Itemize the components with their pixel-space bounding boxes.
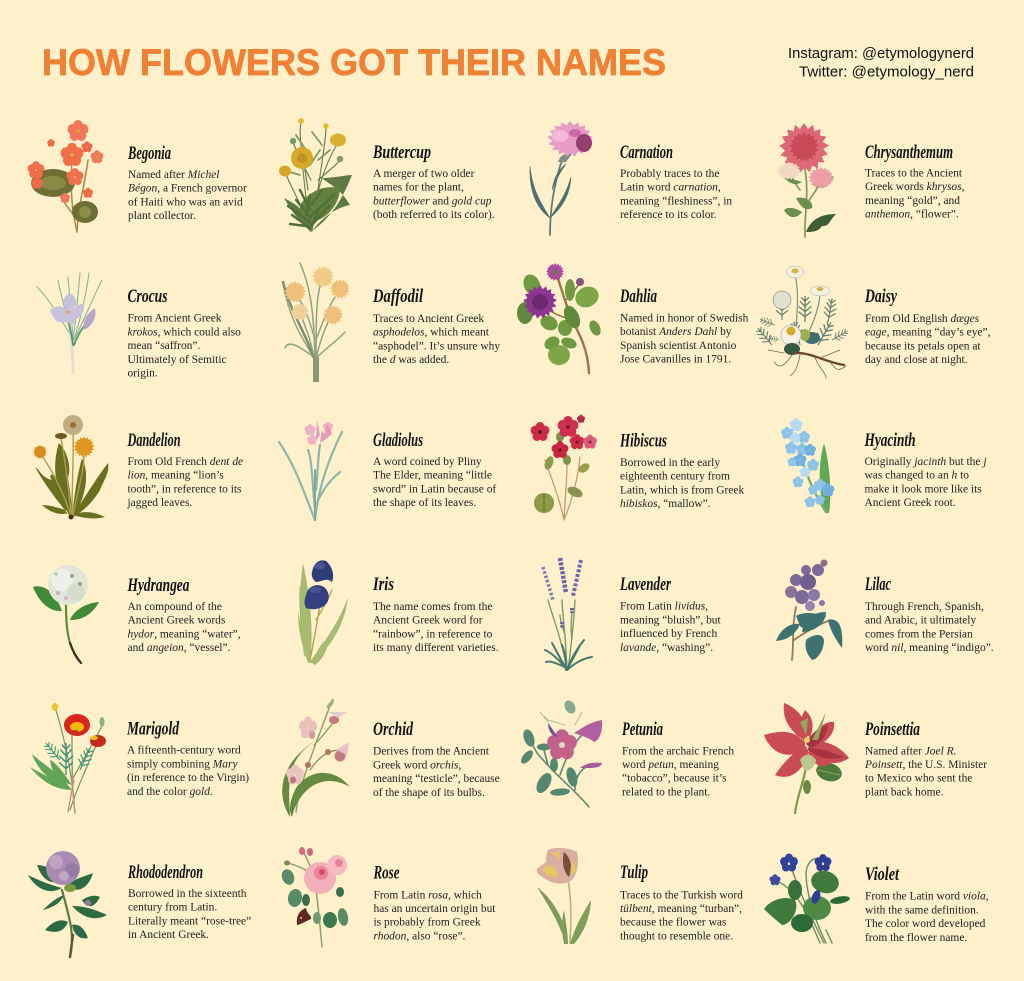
- icon: poinsettia flower: [764, 703, 849, 813]
- text: Marigold: (in reference to the Virgin): [127, 772, 249, 784]
- text: Crocus: From Ancient Greek: [128, 313, 222, 325]
- text: Daisy: eage, meaning “day’s eye”,: [865, 327, 990, 339]
- text: Carnation: Probably traces to the: [620, 168, 719, 180]
- text: Lilac: Through French, Spanish,: [865, 601, 984, 613]
- text: Lavender: From Latin lividus,: [620, 601, 708, 613]
- label: Marigold: Marigold: [126, 718, 179, 740]
- text: Petunia: related to the plant.: [622, 786, 710, 798]
- label: Rose: Rose: [373, 863, 400, 884]
- text: Dandelion: tooth”, in reference to its: [128, 483, 242, 495]
- text: Poinsettia: Poinsett, the U.S. Minister: [865, 759, 987, 771]
- text: Iris: Ancient Greek word for: [373, 615, 483, 627]
- entry: Orchid: [282, 698, 500, 817]
- text: Buttercup: names for the plant,: [373, 182, 464, 194]
- icon: orchid flower: [282, 698, 350, 817]
- text: Crocus: origin.: [128, 368, 158, 380]
- social handles: [788, 45, 974, 80]
- text: Rose: is probably from Greek: [374, 917, 481, 929]
- text: Crocus: Ultimately of Semitic: [128, 354, 227, 366]
- text: Hibiscus: hibiskos, “mallow”.: [620, 498, 711, 510]
- text: Petunia: “tobacco”, because it’s: [622, 773, 727, 785]
- text: Begonia: of Haiti who was an avid: [128, 196, 243, 208]
- entry: Chrysanthemum: [777, 123, 965, 237]
- text: Hibiscus: Borrowed in the early: [620, 457, 720, 469]
- text: Daffodil: Traces to Ancient Greek: [373, 313, 484, 325]
- entry: Begonia: [28, 120, 247, 232]
- text: Tulip: Traces to the Turkish word: [620, 889, 743, 901]
- text: Orchid: Derives from the Ancient: [373, 746, 489, 758]
- label: Hyacinth: Hyacinth: [864, 430, 916, 451]
- text: Daffodil: “asphodel”. It’s unsure why: [373, 340, 500, 352]
- text: Daffodil: asphodelos, which meant: [373, 327, 489, 339]
- icon: begonia flower: [28, 120, 103, 232]
- icon: rose flower with butterfly: [280, 847, 349, 947]
- text: Violet: with the same definition.: [865, 904, 979, 916]
- text: Dandelion: lion, meaning “lion’s: [128, 470, 224, 482]
- text: Petunia: word petun, meaning: [622, 759, 719, 771]
- icon: lavender flower: [543, 558, 592, 670]
- text: Hyacinth: Originally jacinth but the j: [864, 456, 987, 468]
- text: Buttercup: (both referred to its color).: [373, 209, 495, 221]
- entry: Dahlia: [517, 263, 749, 373]
- text: Lavender: meaning “bluish”, but: [620, 614, 722, 626]
- text: Carnation: reference to its color.: [620, 209, 717, 221]
- icon: lilac flower: [776, 560, 842, 660]
- icon: gladiolus flower: [279, 420, 342, 520]
- label: Carnation: Carnation: [620, 142, 673, 163]
- text: Iris: its many different varieties.: [373, 642, 499, 654]
- text: Rose: From Latin rosa, which: [374, 889, 482, 901]
- label: Chrysanthemum: Chrysanthemum: [865, 142, 953, 163]
- icon: rhododendron flower: [28, 851, 107, 957]
- text: Hyacinth: make it look more like its: [864, 483, 982, 495]
- text: Dahlia: Spanish scientist Antonio: [620, 340, 737, 352]
- icon: chrysanthemum flower: [777, 123, 836, 237]
- entry: Petunia: [519, 698, 734, 807]
- text: Daisy: day and close at night.: [865, 354, 968, 366]
- icon: hyacinth flower: [781, 418, 834, 513]
- label: Lavender: Lavender: [619, 574, 671, 595]
- social handles: Instagram: @etymologynerd: [788, 45, 974, 62]
- text: Orchid: of the shape of its bulbs.: [373, 787, 485, 799]
- icon: buttercup flower: [279, 118, 352, 231]
- text: Begonia: plant collector.: [128, 210, 196, 222]
- entry: Poinsettia: [764, 703, 987, 813]
- text: Lavender: influenced by French: [620, 628, 717, 640]
- text: Hydrangea: and angeion, “vessel”.: [128, 642, 230, 654]
- social handles: Twitter: @etymology_nerd: [799, 64, 974, 80]
- text: Dandelion: From Old French dent de: [128, 456, 243, 468]
- label: Poinsettia: Poinsettia: [864, 719, 920, 740]
- entry: Dandelion: [33, 415, 243, 520]
- text: Hibiscus: eighteenth century from: [620, 471, 730, 483]
- text: Buttercup: A merger of two older: [373, 168, 474, 180]
- text: Gladiolus: The Elder, meaning “little: [373, 470, 492, 482]
- entry: Iris: [298, 560, 499, 665]
- text: Marigold: and the color gold.: [127, 786, 213, 798]
- entry: Lilac: [776, 560, 994, 660]
- label: Daffodil: Daffodil: [372, 286, 424, 307]
- label: Begonia: Begonia: [127, 143, 171, 164]
- text: Poinsettia: plant back home.: [865, 786, 944, 798]
- text: Buttercup: butterflower and gold cup: [373, 195, 492, 207]
- text: Hydrangea: An compound of the: [128, 601, 222, 613]
- text: Rhododendron: Literally meant “rose-tree”: [128, 915, 251, 927]
- text: Begonia: Bégon, a French governor: [128, 183, 247, 195]
- label: Hydrangea: Hydrangea: [127, 575, 190, 596]
- title: HOW FLOWERS GOT THEIR NAMES: [42, 42, 666, 83]
- label: Orchid: Orchid: [373, 719, 413, 740]
- text: Poinsettia: to Mexico who sent the: [865, 773, 972, 785]
- text: Tulip: tülbent, meaning “turban”,: [620, 903, 742, 915]
- entry: Buttercup: [279, 118, 495, 231]
- entry: Violet: [764, 854, 989, 944]
- text: Dahlia: botanist Anders Dahl by: [620, 326, 732, 338]
- entry: Hibiscus: [531, 415, 744, 520]
- text: Tulip: thought to resemble one.: [620, 930, 733, 942]
- label: Violet: Violet: [865, 864, 900, 885]
- text: Lilac: word nil, meaning “indigo”.: [865, 642, 994, 654]
- label: Rhododendron: Rhododendron: [127, 862, 203, 883]
- text: Carnation: Latin word carnation,: [620, 182, 721, 194]
- text: Tulip: because the flower was: [620, 917, 727, 929]
- entry: Hyacinth: [781, 418, 987, 513]
- text: Hibiscus: Latin, which is from Greek: [620, 484, 744, 496]
- text: Hyacinth: was changed to an h to: [864, 470, 969, 482]
- text: Rhododendron: Borrowed in the sixteenth: [128, 888, 246, 900]
- icon: violet flower: [764, 854, 850, 943]
- entry: Hydrangea: [33, 565, 241, 663]
- entry: Daisy: [754, 266, 991, 378]
- text: Violet: The color word developed: [865, 918, 986, 930]
- text: Chrysanthemum: anthemon, “flower”.: [865, 209, 959, 221]
- label: Crocus: Crocus: [128, 286, 168, 307]
- icon: daisy flower with roots: [754, 266, 850, 378]
- text: Orchid: Greek word orchis,: [373, 759, 461, 771]
- entry: Daffodil: [283, 263, 500, 382]
- label: Hibiscus: Hibiscus: [619, 430, 667, 452]
- label: Dandelion: Dandelion: [127, 430, 180, 451]
- text: Dahlia: Jose Cavanilles in 1791.: [620, 354, 731, 366]
- icon: iris flower: [298, 560, 348, 665]
- text: Chrysanthemum: Traces to the Ancient: [865, 168, 962, 180]
- text: Iris: The name comes from the: [373, 601, 492, 613]
- entry: Crocus: [37, 273, 241, 380]
- label: Daisy: Daisy: [864, 286, 897, 307]
- text: Orchid: meaning “testicle”, because: [373, 773, 500, 785]
- icon: crocus flower: [37, 273, 102, 372]
- text: Marigold: A fifteenth-century word: [127, 745, 241, 757]
- label: Tulip: Tulip: [620, 862, 648, 883]
- label: Buttercup: Buttercup: [372, 142, 431, 163]
- entry: Tulip: [537, 848, 743, 944]
- icon: dahlia flower: [517, 263, 603, 373]
- text: Petunia: From the archaic French: [622, 745, 734, 757]
- text: Hyacinth: Ancient Greek root.: [864, 497, 956, 509]
- text: Marigold: simply combining Mary: [127, 758, 238, 770]
- label: Gladiolus: Gladiolus: [373, 430, 423, 451]
- label: Petunia: Petunia: [621, 719, 663, 740]
- text: Chrysanthemum: Greek words khrysos,: [865, 181, 964, 193]
- text: Daisy: because its petals open at: [865, 340, 981, 352]
- icon: daffodil flower: [283, 263, 350, 382]
- text: Violet: From the Latin word viola,: [865, 891, 989, 903]
- text: Poinsettia: Named after Joel R.: [865, 745, 956, 757]
- text: Violet: from the flower name.: [865, 932, 967, 944]
- text: Gladiolus: A word coined by Pliny: [373, 456, 482, 468]
- text: Rose: has an uncertain origin but: [374, 903, 496, 915]
- text: Carnation: meaning “fleshiness”, in: [620, 195, 732, 207]
- icon: dandelion flower: [33, 415, 108, 520]
- icon: marigold flower: [30, 703, 106, 813]
- icon: tulip flower: [537, 848, 591, 944]
- entry: Lavender: [543, 558, 722, 670]
- label: Iris: Iris: [372, 574, 394, 595]
- text: Crocus: mean “saffron”.: [128, 340, 200, 352]
- text: Hydrangea: Ancient Greek words: [128, 615, 226, 627]
- text: Rhododendron: century from Latin.: [128, 902, 217, 914]
- icon: hibiscus flower: [531, 415, 597, 520]
- text: Dandelion: jagged leaves.: [126, 497, 192, 509]
- text: Gladiolus: the shape of its leaves.: [373, 497, 476, 509]
- text: Gladiolus: sword” in Latin because of: [373, 483, 496, 495]
- text: Daffodil: the d was added.: [373, 354, 449, 366]
- text: Dahlia: Named in honor of Swedish: [620, 312, 748, 324]
- entry: Gladiolus: [279, 420, 496, 520]
- text: Begonia: Named after Michel: [128, 169, 219, 181]
- icon: hydrangea flower: [33, 565, 99, 663]
- label: Dahlia: Dahlia: [619, 286, 657, 307]
- text: Rhododendron: in Ancient Greek.: [128, 929, 209, 941]
- entry: Rose: [280, 847, 496, 947]
- text: Chrysanthemum: meaning “gold”, and: [865, 195, 960, 207]
- text: Iris: “rainbow”, in reference to: [373, 628, 493, 640]
- text: Crocus: krokos, which could also: [128, 326, 241, 338]
- text: Daisy: From Old English dæges: [865, 313, 979, 325]
- icon: carnation flower: [530, 121, 593, 235]
- entry: Marigold: [30, 703, 249, 813]
- text: Hydrangea: hydor, meaning “water”,: [128, 628, 241, 640]
- text: Lilac: and Arabic, it ultimately: [865, 615, 976, 627]
- entry: Rhododendron: [28, 851, 251, 957]
- text: Rose: rhodon, also “rose”.: [374, 930, 465, 942]
- label: Lilac: Lilac: [864, 574, 891, 595]
- text: Lavender: lavande, “washing”.: [620, 642, 713, 654]
- text: Lilac: comes from the Persian: [865, 628, 973, 640]
- icon: petunia flower: [519, 698, 602, 807]
- entry: Carnation: [530, 121, 732, 235]
